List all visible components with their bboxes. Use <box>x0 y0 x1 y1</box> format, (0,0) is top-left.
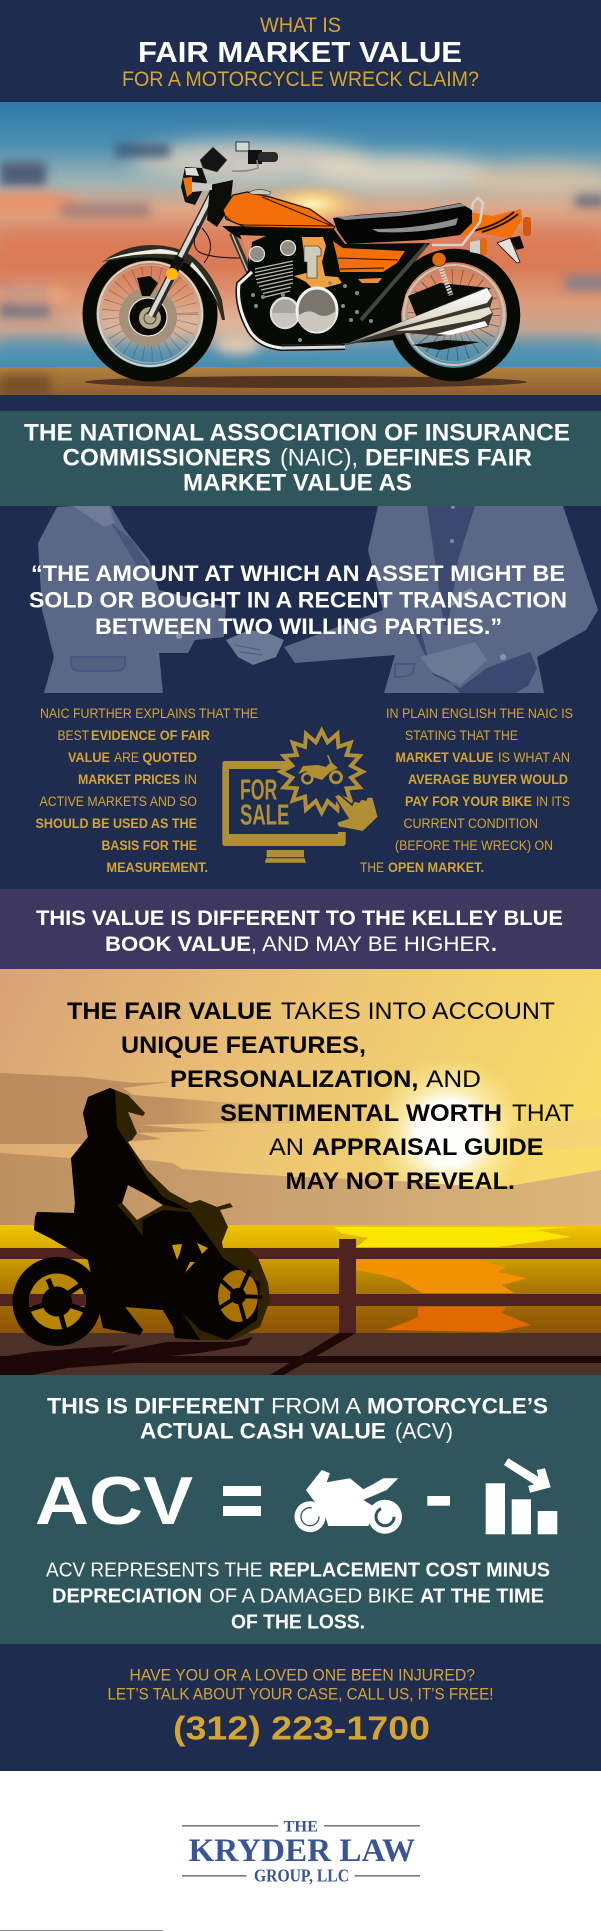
left explanation text: NAIC FURTHER EXPLAINS THAT THE <box>40 706 258 721</box>
sun <box>370 1055 526 1211</box>
call to action question: HAVE YOU OR A LOVED ONE BEEN INJURED? <box>130 1666 475 1684</box>
kelley blue book text: BOOK VALUE <box>105 932 251 956</box>
kelley blue book text: AND MAY BE HIGHER <box>262 932 490 956</box>
water <box>0 1225 601 1333</box>
fender reflector <box>166 268 178 280</box>
cables <box>194 226 240 263</box>
NAIC heading text: (NAIC), <box>280 444 358 472</box>
frame openings <box>172 1243 208 1273</box>
monitor frame <box>222 761 346 846</box>
kelley blue book text <box>36 906 563 956</box>
fair value text: PERSONALIZATION, <box>170 1066 418 1093</box>
icon: for sale monitor <box>222 731 378 863</box>
panel: NAIC heading band <box>0 411 601 506</box>
left explanation text: BASIS FOR THE <box>102 838 197 853</box>
formula: minus sign <box>427 1496 450 1506</box>
seat rail <box>432 198 483 245</box>
left explanation text: QUOTED <box>142 750 197 765</box>
ACV explanation: REPLACEMENT COST MINUS <box>269 1560 550 1582</box>
icon: motorcycle <box>90 142 531 374</box>
front fork <box>151 186 217 316</box>
left explanation text <box>36 706 258 875</box>
NAIC heading text: THE NATIONAL ASSOCIATION OF INSURANCE <box>24 420 570 446</box>
fair value text: THE FAIR VALUE <box>67 998 272 1025</box>
panel: motorcycle photo <box>0 102 601 395</box>
portfolio <box>413 628 537 693</box>
panel: kelley blue book band <box>0 889 601 969</box>
ACV explanation: OF THE LOSS. <box>231 1612 365 1634</box>
kelley blue book text: THIS VALUE IS DIFFERENT TO THE KELLEY BLUE <box>36 906 563 930</box>
heading: for a motorcycle wreck claim: FOR A MOTORCYCLE WRECK CLAIM? <box>122 68 479 91</box>
left explanation text: IN <box>184 772 197 787</box>
mini motorcycle <box>298 755 342 783</box>
fence <box>0 1239 601 1333</box>
left explanation text: ACTIVE MARKETS AND SO <box>40 794 197 809</box>
for sale label: SALE <box>240 799 289 831</box>
headlight <box>181 167 212 205</box>
ACV heading: (ACV) <box>395 1418 453 1444</box>
fair value text: THAT <box>512 1100 574 1127</box>
sun glow <box>268 184 358 221</box>
fair value text: SENTIMENTAL WORTH <box>220 1100 502 1127</box>
triangular sky gap near tank <box>240 235 266 262</box>
front wheel <box>90 254 210 374</box>
right explanation text: MARKET VALUE <box>396 750 494 765</box>
right explanation text: CURRENT CONDITION <box>404 816 538 831</box>
monitor stand <box>265 850 306 863</box>
frame strut <box>361 244 427 320</box>
clouds <box>0 1073 601 1225</box>
rear blinkers <box>432 238 487 266</box>
for sale label <box>240 774 289 831</box>
fair value text: AN <box>269 1134 304 1161</box>
handshake hands <box>226 630 284 665</box>
front fender <box>102 245 225 320</box>
starburst <box>281 731 363 813</box>
ACV heading <box>47 1394 548 1444</box>
left explanation text: MARKET PRICES <box>78 772 180 787</box>
panel: actual cash value <box>0 1375 601 1644</box>
rider black <box>34 1088 200 1340</box>
right explanation text: IN ITS <box>536 794 570 809</box>
panel: definition quote <box>0 505 601 888</box>
carburetor <box>304 246 321 278</box>
logo: Kryder Law Group: THE <box>284 1818 318 1836</box>
left explanation text: BEST <box>58 728 89 743</box>
phone number: (312) 223-1700 <box>173 1710 430 1746</box>
for sale label: FOR <box>240 774 277 806</box>
left figure <box>38 506 226 693</box>
NAIC heading text: DEFINES FAIR <box>365 444 532 472</box>
quote text: SOLD OR BOUGHT IN A RECENT TRANSACTION <box>29 588 567 612</box>
bolts <box>251 281 373 342</box>
ACV heading: ACTUAL CASH VALUE <box>140 1418 386 1444</box>
rear wheel <box>394 256 514 374</box>
front wheel spokes <box>213 1270 262 1325</box>
fair value text: MAY NOT REVEAL. <box>286 1168 515 1195</box>
road <box>0 1333 601 1375</box>
rear shock <box>440 266 451 295</box>
right explanation text: PAY FOR YOUR BIKE <box>405 794 532 809</box>
ACV explanation: OF A DAMAGED BIKE <box>209 1586 414 1608</box>
fair value text: TAKES INTO ACCOUNT <box>281 998 555 1025</box>
formula: equals sign <box>223 1486 261 1516</box>
fair value text: APPRAISAL GUIDE <box>312 1134 544 1161</box>
left explanation text: VALUE <box>68 750 110 765</box>
illustration: handshake <box>38 505 598 693</box>
mufflers <box>342 287 493 346</box>
NAIC heading text: MARKET VALUE AS <box>183 470 412 496</box>
ACV explanation <box>46 1560 550 1634</box>
right explanation text: THE <box>360 860 384 875</box>
front wheel opening <box>217 1269 259 1323</box>
NAIC heading text <box>24 420 570 496</box>
gauges <box>200 147 227 172</box>
fair value text: AND <box>426 1066 481 1093</box>
formula: ACV: ACV <box>35 1463 193 1539</box>
logo: Kryder Law Group <box>182 1818 420 1886</box>
right figure <box>284 506 598 693</box>
ACV explanation: ACV REPRESENTS THE <box>46 1560 262 1582</box>
kelley blue book text: . <box>491 932 497 956</box>
ACV heading: MOTORCYCLE’S <box>367 1394 548 1418</box>
engine block <box>222 226 430 345</box>
seat <box>333 203 472 244</box>
panel: sunset rider <box>0 969 601 1375</box>
quote text: “THE AMOUNT AT WHICH AN ASSET MIGHT BE <box>31 561 565 586</box>
arrow <box>504 1458 551 1493</box>
handlebars <box>226 142 278 171</box>
quote text: BETWEEN TWO WILLING PARTIES.” <box>95 614 502 639</box>
triple tree <box>207 180 233 227</box>
pointing hand <box>334 794 378 832</box>
sun reflection <box>334 1227 571 1332</box>
left explanation text: EVIDENCE OF FAIR <box>91 728 210 743</box>
tail light <box>523 217 531 236</box>
right explanation text <box>360 706 573 875</box>
fair value text <box>67 998 574 1195</box>
frame down tube <box>232 233 249 272</box>
side panel <box>333 241 405 272</box>
panel: call to action <box>0 1644 601 1771</box>
fuel tank <box>223 192 335 229</box>
call to action invitation: LET’S TALK ABOUT YOUR CASE, CALL US, IT’S FREE! <box>108 1686 494 1704</box>
left explanation text: MEASUREMENT. <box>106 860 208 875</box>
ACV heading: THIS IS DIFFERENT <box>47 1394 265 1418</box>
right explanation text: AVERAGE BUYER WOULD <box>408 772 568 787</box>
right explanation text: (BEFORE THE WRECK) ON <box>395 838 553 853</box>
heading: what is: WHAT IS <box>260 14 341 37</box>
bike front black <box>142 1210 260 1340</box>
logo: Kryder Law Group: KRYDER LAW <box>188 1833 415 1869</box>
right explanation text: STATING THAT THE <box>405 728 518 743</box>
engine cylinder fins <box>255 261 293 297</box>
silhouette: rider and motorcycle <box>12 1088 270 1346</box>
right hand <box>420 642 487 685</box>
exhaust header pipe <box>238 272 345 348</box>
gap in engine <box>294 237 342 288</box>
left explanation text: SHOULD BE USED AS THE <box>36 816 197 831</box>
bike shadow <box>85 376 527 388</box>
left explanation text: ARE <box>114 750 139 765</box>
ACV explanation: DEPRECIATION <box>52 1586 202 1608</box>
outer silhouette <box>34 1088 270 1340</box>
ACV explanation: AT THE TIME <box>420 1586 544 1608</box>
quote text <box>29 561 567 639</box>
engine covers <box>250 240 337 332</box>
heading: fair market value: FAIR MARKET VALUE <box>138 37 462 69</box>
right explanation text: IS WHAT AN <box>498 750 570 765</box>
rear wheel <box>12 1257 102 1346</box>
icon: sport motorcycle <box>294 1470 402 1534</box>
kelley blue book text: , <box>251 932 257 956</box>
tail fin <box>497 238 520 263</box>
ACV heading: FROM A <box>271 1394 361 1418</box>
right explanation text: IN PLAIN ENGLISH THE NAIC IS <box>386 706 573 721</box>
panel: title header <box>0 0 601 102</box>
logo: Kryder Law Group: GROUP, LLC <box>254 1866 349 1886</box>
right explanation text: OPEN MARKET. <box>388 860 484 875</box>
tail <box>460 209 522 238</box>
icon: depreciation chart <box>486 1458 557 1534</box>
fair value text: UNIQUE FEATURES, <box>121 1032 366 1059</box>
NAIC heading text: COMMISSIONERS <box>62 444 271 472</box>
panel: footer <box>0 1771 601 1931</box>
lower pipe <box>282 347 345 348</box>
